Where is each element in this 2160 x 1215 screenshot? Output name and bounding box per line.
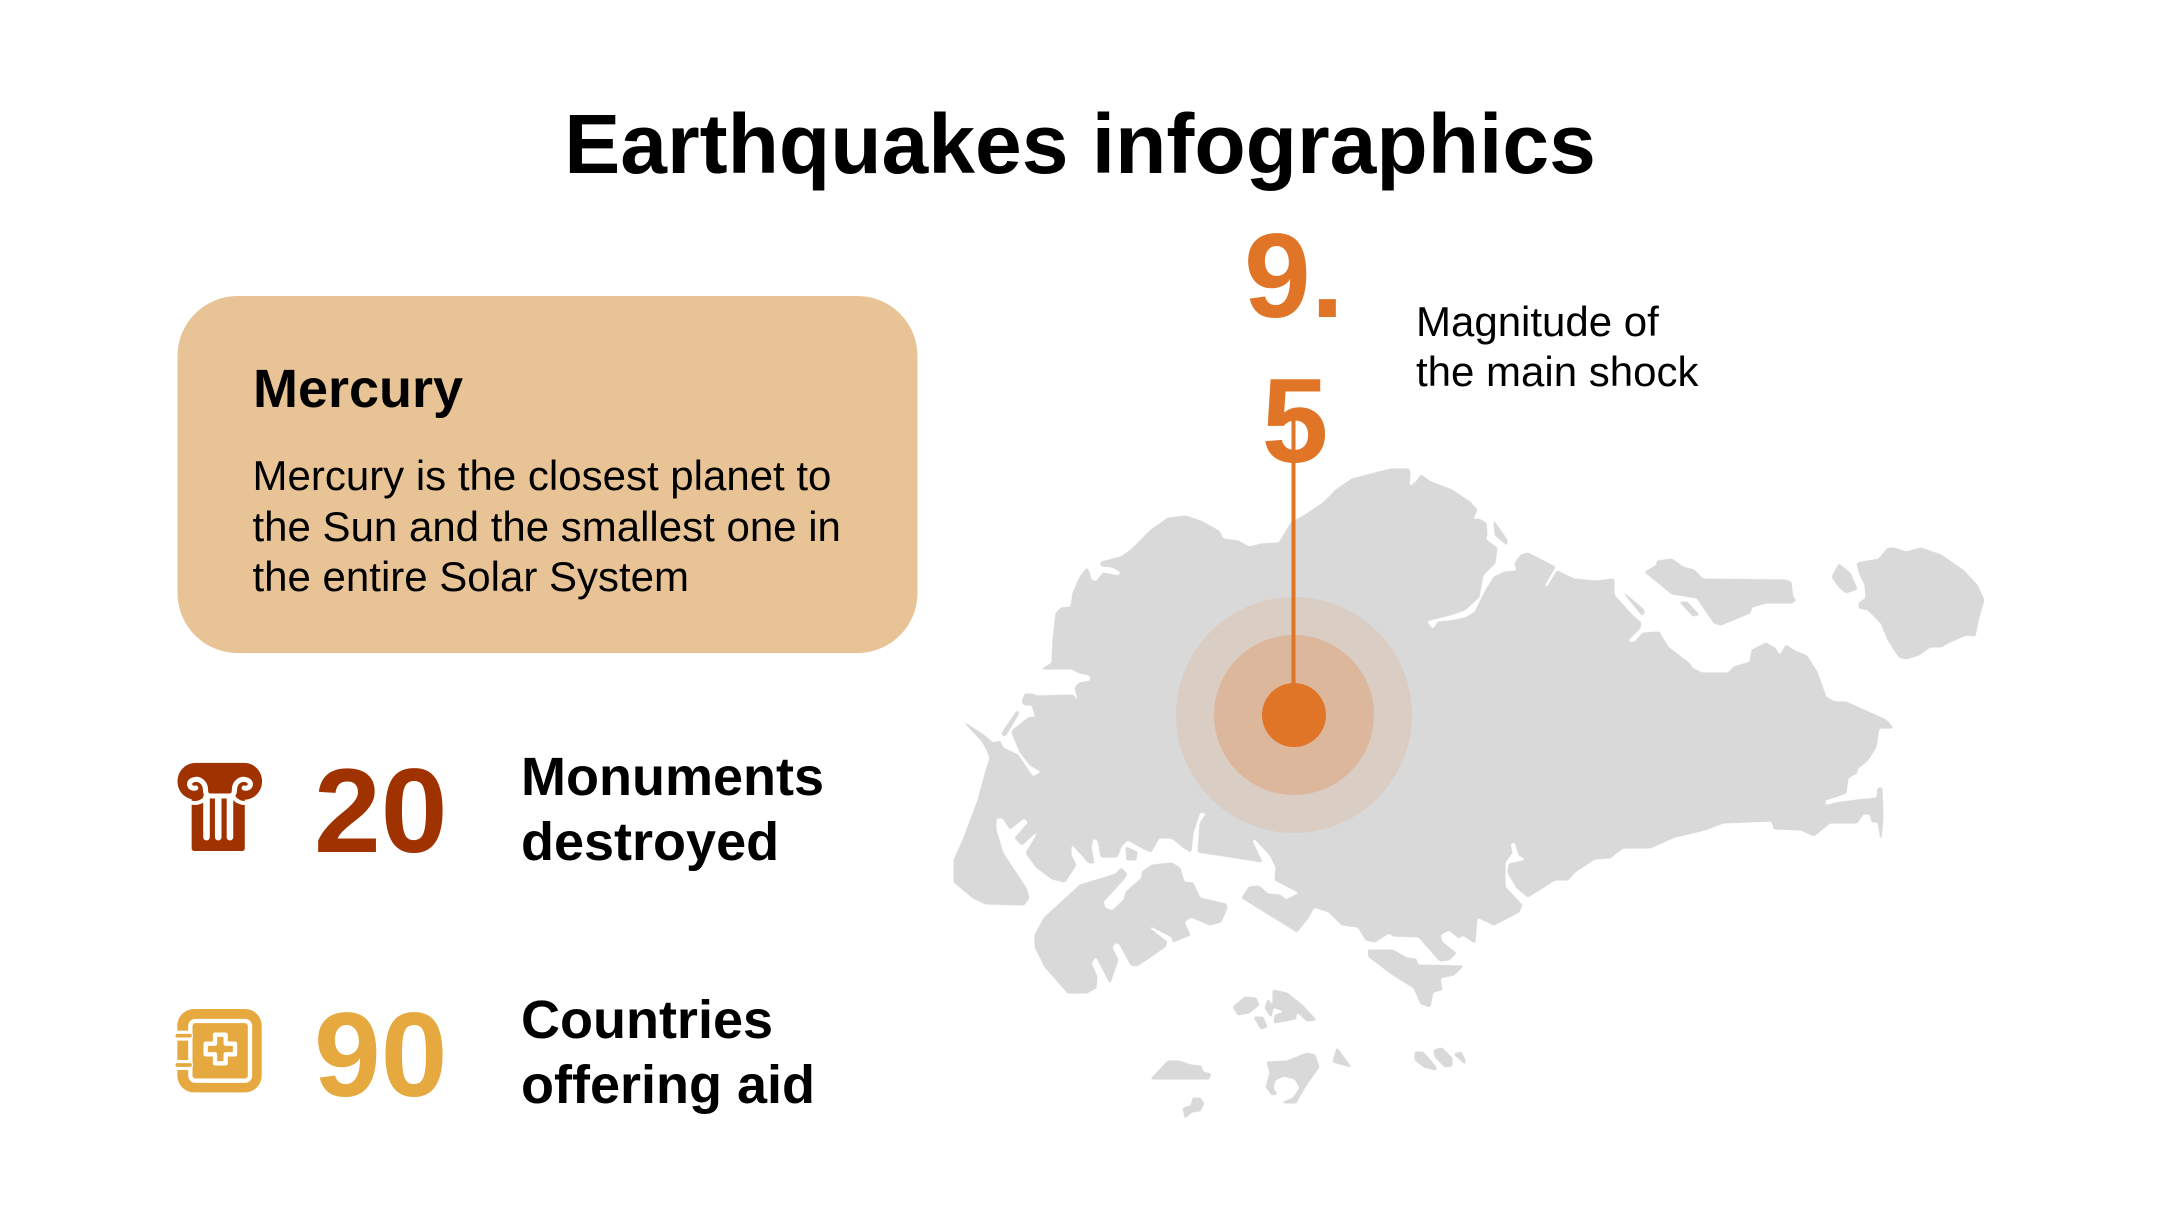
- stat label: countries offering aid: offering aid: [521, 1055, 815, 1115]
- stat label: monuments destroyed: destroyed: [521, 812, 779, 872]
- card body text: the entire Solar System: [252, 553, 689, 600]
- stat number: 20: 20: [314, 744, 447, 878]
- card body text: Mercury is the closest planet to: [252, 452, 831, 499]
- panel: Mercury card: [178, 296, 918, 653]
- map of Singapore: [954, 469, 1984, 1118]
- epicentre marker: [1176, 417, 1412, 833]
- small islets near main island: [1126, 847, 1137, 860]
- Pulau Tekong: [1857, 548, 1984, 659]
- middle shock ring: [1214, 635, 1374, 795]
- title: Earthquakes infographics: [564, 97, 1596, 191]
- magnitude number: 5: [1262, 354, 1328, 488]
- outer shock ring: [1176, 597, 1412, 833]
- southern islands: [1151, 990, 1465, 1118]
- Sentosa: [1368, 950, 1463, 1007]
- card body text: the Sun and the smallest one in: [252, 503, 841, 550]
- icon: aid notebook with plus: [175, 1009, 262, 1092]
- magnitude number: 9.: [1244, 209, 1344, 343]
- epicentre dot: [1262, 683, 1326, 747]
- leader line: [1292, 417, 1296, 707]
- Tekong islet: [1832, 564, 1857, 593]
- card background: [178, 296, 918, 653]
- icon: column: [178, 763, 262, 851]
- stat number: 90: 90: [314, 988, 447, 1122]
- stat label: countries offering aid: Countries: [521, 990, 773, 1050]
- magnitude caption: Magnitude of: [1416, 298, 1659, 345]
- Pulau Ubin: [1645, 559, 1796, 625]
- Jurong Island: [1035, 863, 1227, 993]
- west coast islet: [1002, 711, 1019, 736]
- main island: [954, 469, 1893, 961]
- stat label: monuments destroyed: Monuments: [521, 747, 824, 807]
- card heading: Mercury: [253, 359, 463, 419]
- magnitude caption: the main shock: [1416, 348, 1699, 395]
